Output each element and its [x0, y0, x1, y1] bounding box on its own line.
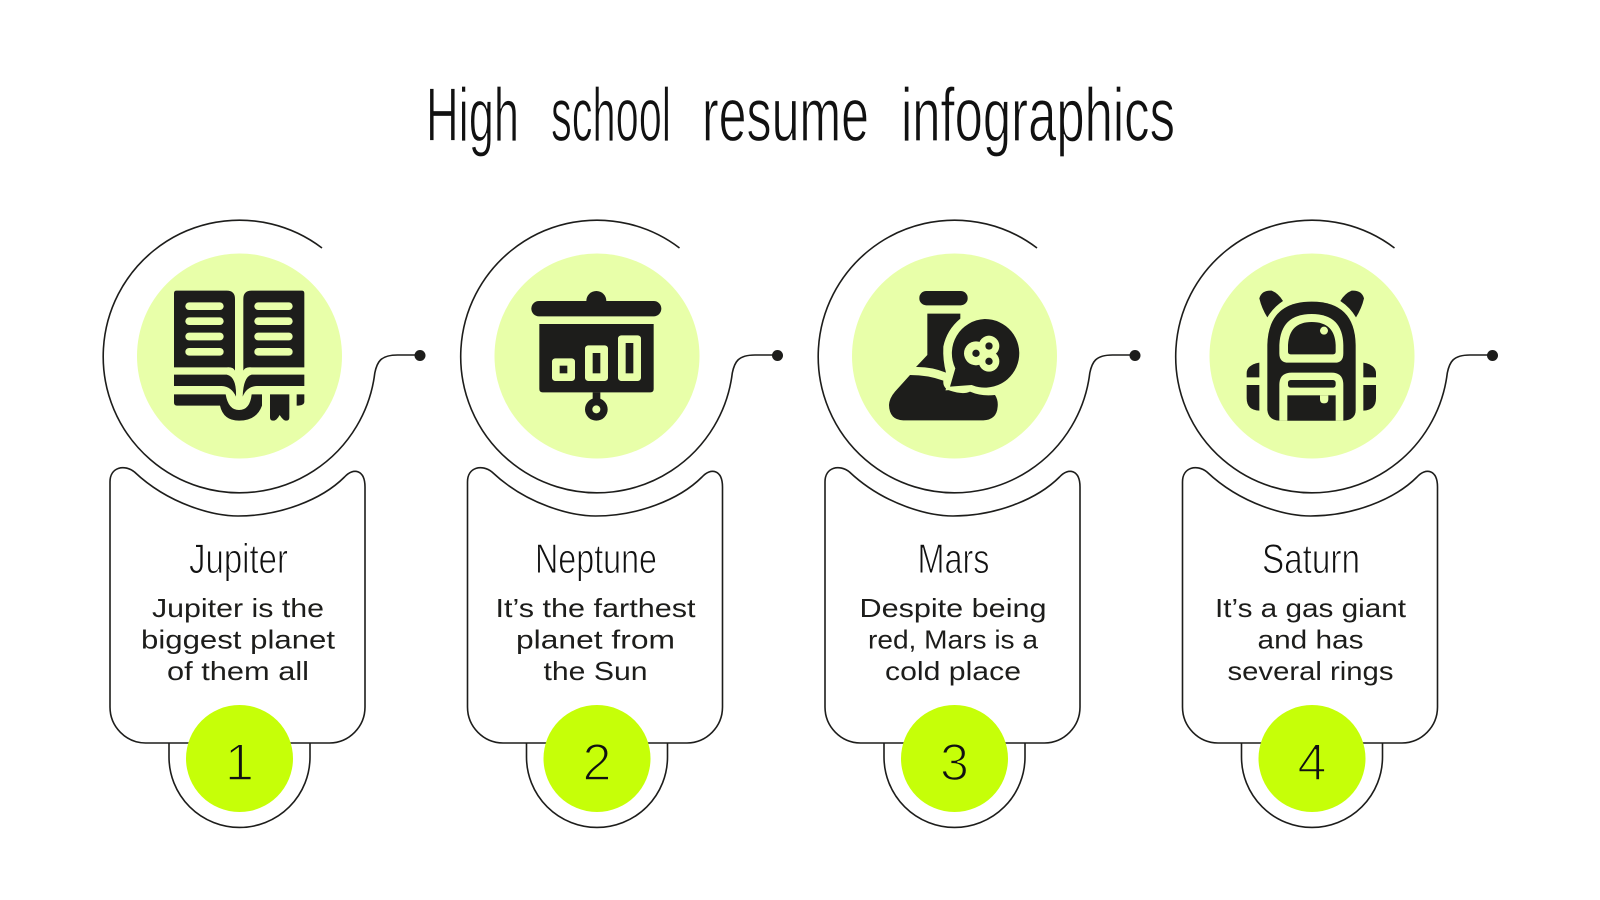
icon background circle [137, 254, 342, 458]
title: infographics [901, 73, 1175, 158]
number badge [1258, 705, 1366, 812]
heading: Mars [918, 535, 990, 582]
title: High [426, 73, 519, 158]
number badge [186, 705, 293, 812]
number badge [544, 705, 650, 812]
description: planet from [516, 624, 675, 654]
number badge outline [884, 743, 1025, 827]
number badge outline [1242, 743, 1382, 827]
description: cold place [885, 656, 1021, 686]
heading: Neptune [535, 535, 657, 582]
connector dot [414, 350, 426, 361]
card outline [110, 468, 365, 743]
card outline [1182, 468, 1438, 743]
panel: Jupiter [103, 220, 426, 827]
card outline [825, 468, 1080, 743]
number badge: 3 [940, 734, 969, 792]
description: the Sun [544, 656, 647, 686]
description: red, Mars is a [868, 624, 1039, 654]
panel: Saturn [1176, 220, 1498, 827]
title: school [551, 73, 671, 158]
number badge [901, 705, 1008, 812]
ring with connector [818, 220, 1134, 493]
icon background circle [852, 254, 1057, 458]
icon background circle [1210, 254, 1414, 458]
icon: flask with molecule bubble [889, 291, 1019, 420]
description: Jupiter is the [152, 593, 324, 623]
description [860, 593, 1046, 686]
description [141, 593, 336, 686]
description [1215, 593, 1407, 686]
number badge outline [526, 743, 668, 827]
icon: backpack [1247, 291, 1376, 421]
description: several rings [1228, 656, 1394, 686]
icon: presentation board [531, 291, 661, 421]
number badge: 4 [1298, 734, 1326, 792]
panel: Neptune [461, 220, 783, 827]
card outline [468, 468, 722, 743]
number badge: 1 [225, 734, 254, 792]
description: and has [1258, 624, 1364, 654]
panel: Mars [818, 220, 1140, 827]
icon background circle [494, 254, 700, 458]
heading: Jupiter [189, 535, 288, 582]
description [496, 593, 696, 686]
description: of them all [167, 656, 309, 686]
heading: Saturn [1262, 535, 1360, 582]
connector dot [1487, 350, 1498, 361]
description: It’s a gas giant [1215, 593, 1407, 623]
description: It’s the farthest [496, 593, 696, 623]
title: resume [702, 73, 869, 158]
number badge outline [169, 743, 310, 827]
description: Despite being [860, 593, 1046, 623]
connector dot [1130, 350, 1140, 361]
description: biggest planet [141, 624, 336, 654]
icon: open book [174, 291, 304, 421]
ring with connector [461, 220, 777, 493]
connector dot [772, 350, 783, 361]
ring with connector [1176, 220, 1492, 493]
number badge: 2 [583, 734, 611, 792]
ring with connector [103, 220, 420, 493]
